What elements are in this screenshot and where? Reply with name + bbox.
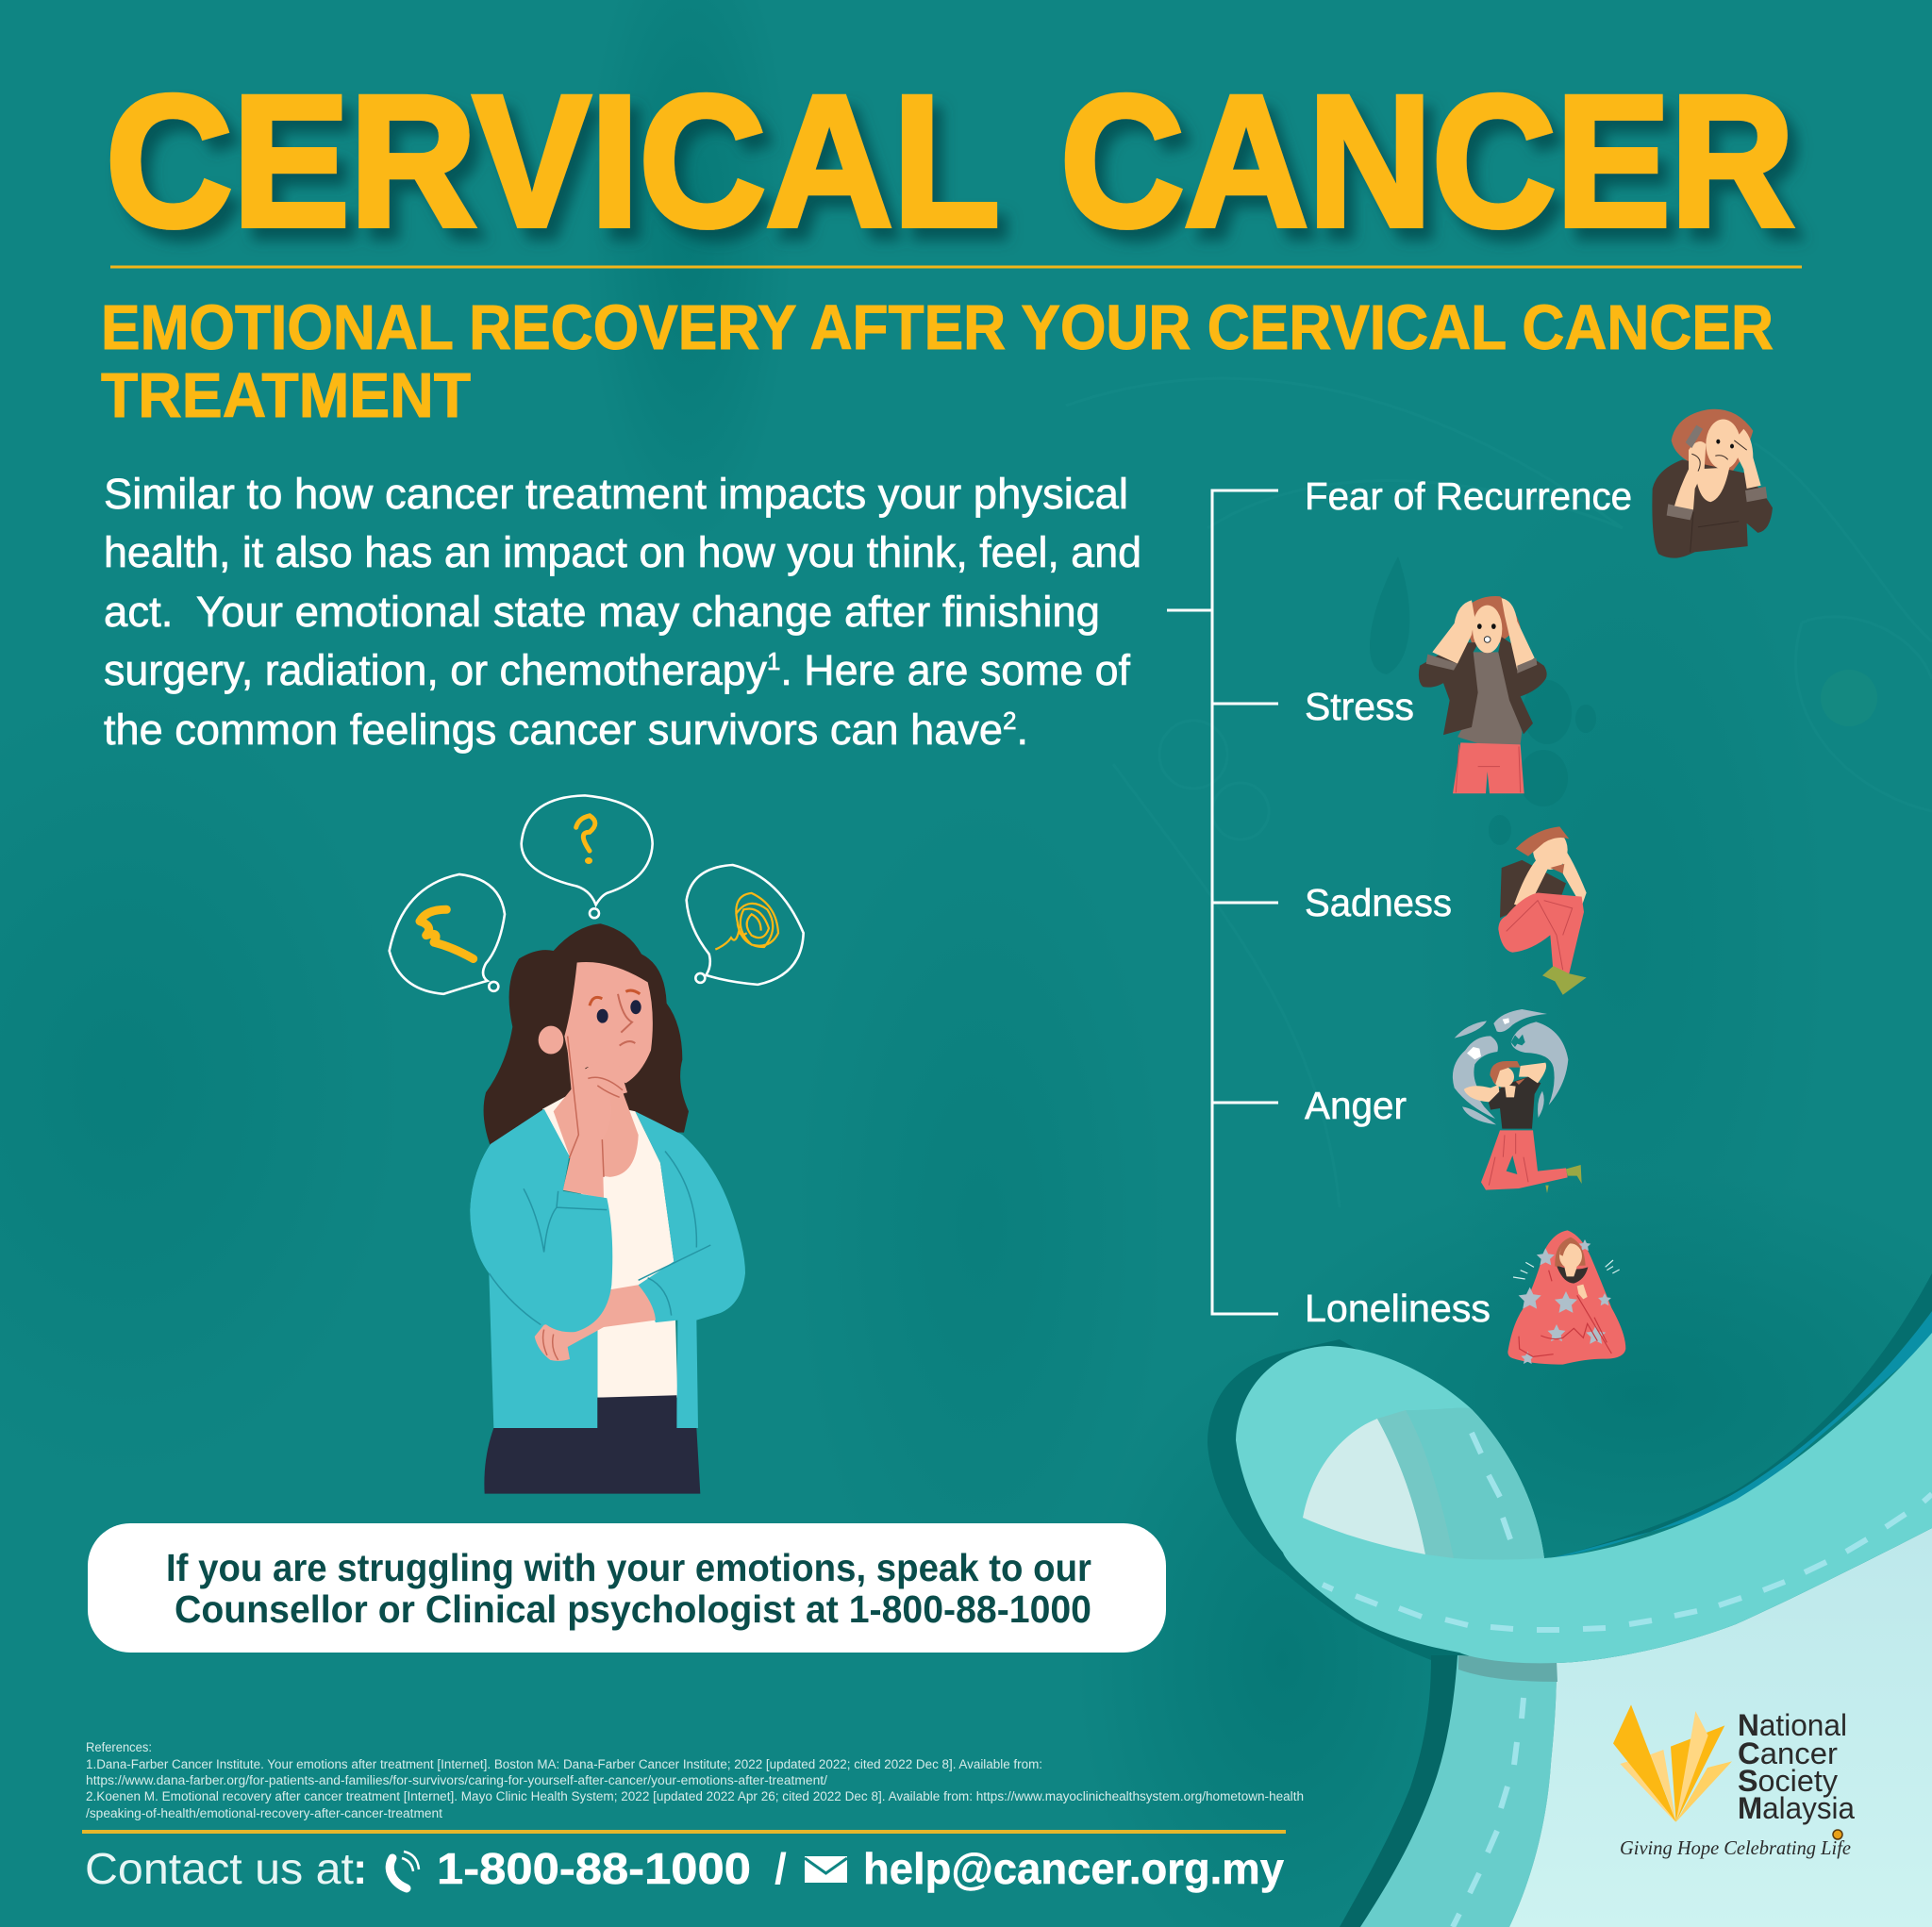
intro paragraph <box>104 470 1141 754</box>
references: 1.Dana-Farber Cancer Institute. Your emotions after treatment [Internet]. Boston MA: Dana-Farber Cancer Institute; 2022 [updated 2022; cited 2022 Dec 8]. Available from: <box>86 1757 1042 1771</box>
logo wordmark <box>1738 1708 1855 1825</box>
icon: envelope <box>805 1856 847 1883</box>
references <box>86 1740 1304 1820</box>
intro paragraph: act. Your emotional state may change after finishing <box>104 588 1100 636</box>
road dashes <box>1323 1433 1932 1630</box>
lower forearm and hand <box>535 1285 656 1361</box>
references: 2.Koenen M. Emotional recovery after cancer treatment [Internet]. Mayo Clinic Health System; 2022 [updated 2022 Apr 26; cited 2022 Dec 8]. Available from: https://www.mayoclinichealthsystem.org/hometown-health <box>86 1789 1304 1803</box>
feeling labels: Sadness <box>1305 881 1452 924</box>
illustration: loneliness character <box>1507 1230 1625 1365</box>
contact bar <box>85 1844 1284 1893</box>
face <box>564 962 653 1083</box>
subtitle: TREATMENT <box>101 360 471 431</box>
loop and band <box>1236 1333 1932 1663</box>
right band shadow <box>1547 1273 1932 1559</box>
pale corner <box>1509 1528 1932 1927</box>
clothing and finger lines <box>489 1151 710 1325</box>
title: CERVICAL <box>106 57 1000 265</box>
contact bar: : <box>353 1844 367 1893</box>
feeling labels: Loneliness <box>1305 1287 1491 1330</box>
thought bubbles <box>390 795 804 994</box>
tail dashes <box>1453 1698 1524 1927</box>
intro paragraph: 2 <box>1003 706 1016 735</box>
raised arm sleeve <box>470 1109 612 1332</box>
intro paragraph: Similar to how cancer treatment impacts your physical <box>104 470 1128 518</box>
thinking hand <box>563 1034 627 1198</box>
intro paragraph: surgery, radiation, or chemotherapy <box>104 646 771 694</box>
contact bar: Contact us at <box>85 1844 354 1893</box>
tail overlap shadow <box>1458 1655 1557 1682</box>
intro paragraph: 1 <box>767 647 780 675</box>
contact bar: / <box>774 1844 787 1893</box>
intro paragraph: the common feelings cancer survivors can have <box>104 706 1000 754</box>
neck and shirt <box>542 1096 677 1398</box>
tail <box>1360 1655 1557 1927</box>
references: /speaking-of-health/emotional-recovery-after-cancer-treatment <box>86 1806 442 1820</box>
contact bar: help@cancer.org.my <box>863 1844 1284 1893</box>
title <box>106 57 1794 265</box>
logo wordmark: Cancer <box>1738 1736 1838 1770</box>
intro paragraph: . <box>1016 706 1028 754</box>
illustration: fear of recurrence character <box>1652 409 1773 558</box>
tail shadow <box>1340 1655 1459 1927</box>
loop shadow <box>1208 1339 1472 1670</box>
bracket connector <box>1167 490 1278 1314</box>
intro paragraph: health, it also has an impact on how you think, feel, and <box>104 528 1141 576</box>
logo tagline: Giving Hope Celebrating Life <box>1620 1836 1851 1859</box>
feeling labels: Stress <box>1305 685 1414 728</box>
feeling labels: Fear of Recurrence <box>1305 474 1632 518</box>
illustration: sadness character <box>1498 826 1587 995</box>
callout: Counsellor or Clinical psychologist at 1-800-88-1000 <box>175 1587 1091 1631</box>
loop window <box>1303 1419 1425 1554</box>
references: References: <box>86 1740 152 1754</box>
logo wordmark: Malaysia <box>1738 1791 1855 1825</box>
references: https://www.dana-farber.org/for-patients-and-families/for-survivors/caring-for-yourself-after-cancer/your-emotions-after-treatment/ <box>86 1773 827 1787</box>
logo swirl <box>1833 1830 1842 1839</box>
loop back road <box>1406 1407 1544 1560</box>
logo: National Cancer Society Malaysia <box>1613 1704 1855 1859</box>
jacket right with sleeve <box>635 1111 745 1428</box>
callout: If you are struggling with your emotions, speak to our <box>166 1546 1091 1589</box>
feeling labels <box>1305 474 1632 1330</box>
ribbon road <box>1208 1273 1932 1927</box>
icon: phone <box>390 1852 419 1888</box>
callout <box>88 1523 1166 1653</box>
logo wordmark: Society <box>1738 1764 1838 1798</box>
illustration: anger character <box>1453 1009 1582 1193</box>
illustration: stress character <box>1419 596 1547 793</box>
intro paragraph: . Here are some of <box>780 646 1130 694</box>
hair <box>484 923 689 1147</box>
title: CANCER <box>1060 57 1794 265</box>
bubble scribbles <box>420 816 778 959</box>
subtitle <box>101 292 1774 431</box>
subtitle: EMOTIONAL RECOVERY AFTER YOUR CERVICAL CANCER <box>101 292 1774 363</box>
illustration: thinking woman with thought bubbles <box>390 795 804 1494</box>
feeling labels: Anger <box>1305 1084 1407 1127</box>
jacket body left <box>470 1109 597 1428</box>
contact bar: 1-800-88-1000 <box>437 1844 751 1893</box>
logo mark <box>1613 1704 1732 1822</box>
logo wordmark: National <box>1738 1708 1847 1742</box>
trousers <box>484 1395 700 1494</box>
